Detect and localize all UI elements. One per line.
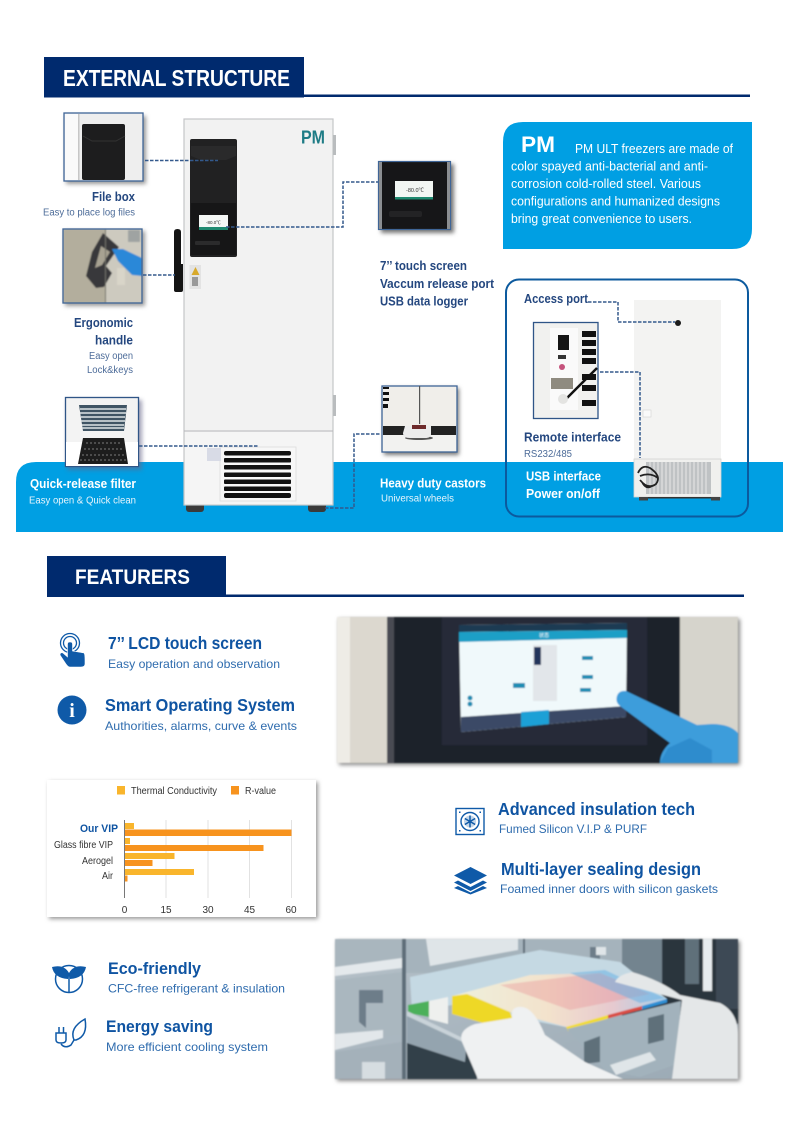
left drawers	[335, 939, 402, 972]
label: remote interface	[524, 430, 621, 460]
freezer front view	[174, 119, 336, 512]
label: ergonomic handle: handle	[95, 334, 133, 348]
chart bars	[124, 823, 292, 882]
white PM logo: PM	[521, 132, 555, 157]
section heading: featurers	[47, 556, 744, 597]
label: file box: Easy to place log files	[43, 208, 135, 218]
feature: smart operating system: Smart Operating System	[105, 695, 295, 715]
callout lines	[139, 160, 675, 508]
section heading: featurers: FEATURERS	[75, 566, 190, 589]
PM logo: PM	[301, 128, 325, 148]
feature: eco-friendly: Eco-friendly	[108, 959, 202, 978]
feature: LCD touch screen	[108, 633, 280, 671]
filter thumbnail	[66, 398, 142, 470]
chart legend	[117, 786, 276, 797]
chart axis labels: 60	[285, 905, 297, 916]
label: ergonomic handle	[74, 316, 133, 376]
label: file box: File box	[92, 190, 135, 204]
feature: multi-layer sealing design	[500, 859, 718, 896]
feature: multi-layer sealing design: Foamed inner doors with silicon gaskets	[500, 882, 718, 896]
icon: eco-friendly	[52, 966, 86, 992]
label: USB and power: USB interface	[526, 470, 601, 484]
label: ergonomic handle: Easy open	[89, 351, 133, 362]
top drawers	[406, 939, 622, 973]
touch screen thumbnail: -80.0℃	[406, 187, 425, 194]
file box thumbnail	[64, 113, 146, 184]
rating label	[207, 448, 221, 461]
chart axis labels: 15	[160, 905, 172, 916]
label: ergonomic handle: Ergonomic	[74, 316, 133, 330]
feature: eco-friendly: CFC-free refrigerant & insulation	[108, 982, 285, 996]
feature: advanced insulation tech	[498, 799, 695, 836]
callout: PM ULT freezers: bring great convenience to users.	[511, 212, 692, 226]
icon: insulation	[456, 808, 484, 834]
icon: info	[58, 696, 86, 724]
photo: sample rack in freezer	[335, 939, 740, 1081]
sample tray	[407, 950, 681, 1077]
label: touch screen features: 7’’ touch screen	[380, 259, 467, 273]
label: quick-release filter: Easy open & Quick clean	[29, 496, 136, 506]
label: heavy duty castors	[380, 476, 486, 504]
callout: PM ULT freezers: color spayed anti-bacterial and anti-	[511, 160, 708, 174]
label: quick-release filter: Quick-release filter	[30, 477, 136, 491]
label: heavy duty castors: Universal wheels	[381, 494, 454, 504]
label: touch screen features: Vaccum release port	[380, 277, 495, 291]
section heading: external structure: EXTERNAL STRUCTURE	[63, 65, 290, 91]
feature: eco-friendly	[108, 959, 285, 996]
callout: PM ULT freezers	[503, 122, 752, 249]
port thumbnail	[534, 322, 598, 418]
chart category labels	[54, 823, 118, 882]
label: heavy duty castors: Heavy duty castors	[380, 476, 486, 490]
icon: layers	[454, 867, 487, 894]
feature: LCD touch screen: Easy operation and observation	[108, 657, 280, 671]
section heading: external structure	[44, 57, 750, 98]
door handle	[174, 229, 183, 292]
touch screen display	[459, 623, 627, 732]
control and file box panel	[190, 139, 237, 257]
callout: PM ULT freezers: PM ULT freezers are made of	[575, 142, 733, 156]
bar chart: thermal conductivity vs R-value	[47, 780, 318, 919]
dark cabinet right	[622, 939, 738, 1024]
label: touch screen features	[380, 259, 495, 308]
gloved finger	[616, 691, 738, 763]
rear freezer	[634, 300, 721, 500]
label: remote interface: Remote interface	[524, 430, 621, 444]
feature: smart operating system	[105, 695, 297, 733]
callout: PM ULT freezers: configurations and humanized designs	[511, 194, 720, 208]
feature: LCD touch screen: 7’’ LCD touch screen	[108, 633, 262, 653]
chart category labels: Aerogel	[82, 856, 113, 867]
chart legend: R-value	[245, 786, 276, 797]
castor thumbnail	[382, 386, 459, 455]
feature: advanced insulation tech: Fumed Silicon V.I.P & PURF	[499, 822, 647, 836]
icon: energy saving	[56, 1019, 86, 1047]
chart axis labels	[122, 905, 297, 916]
photo: touch screen in use	[337, 617, 740, 765]
panel: rear view	[506, 280, 748, 516]
label: remote interface: RS232/485	[524, 449, 572, 460]
chart legend: Thermal Conductivity	[131, 786, 217, 797]
compressor vent	[220, 447, 296, 501]
feature: energy saving: Energy saving	[106, 1017, 213, 1036]
control and file box panel: -80.0℃	[206, 220, 221, 225]
label: quick-release filter	[29, 477, 136, 506]
rear panel outline	[506, 280, 748, 516]
chart axis labels: 0	[122, 905, 128, 916]
chart axis labels: 30	[202, 905, 214, 916]
feature: smart operating system: Authorities, alarms, curve & events	[105, 719, 297, 733]
handle thumbnail	[63, 229, 145, 306]
warning label	[190, 265, 201, 289]
label: access port: Access port	[524, 292, 589, 306]
chart category labels: Air	[102, 871, 114, 882]
chart category labels: Glass fibre VIP	[54, 840, 113, 851]
panel: external structure	[16, 57, 783, 532]
feature: multi-layer sealing design: Multi-layer sealing design	[501, 859, 701, 879]
touch screen thumbnail	[378, 162, 454, 233]
feature: advanced insulation tech: Advanced insulation tech	[498, 799, 695, 819]
label: file box	[43, 190, 135, 218]
chart category labels: Our VIP	[80, 823, 118, 835]
label: touch screen features: USB data logger	[380, 294, 468, 308]
feature: energy saving	[106, 1017, 268, 1054]
icon: info: i	[69, 700, 75, 722]
touch screen display: 状态	[539, 632, 549, 639]
label: USB and power	[526, 470, 601, 501]
label: USB and power: Power on/off	[526, 487, 601, 501]
label: ergonomic handle: Lock&keys	[87, 365, 133, 376]
feature: energy saving: More efficient cooling system	[106, 1040, 268, 1054]
panel: featurers	[47, 556, 744, 1081]
chart axis labels: 45	[244, 905, 255, 916]
callout: PM ULT freezers: corrosion cold-rolled steel. Various	[511, 177, 701, 191]
gloved hands	[461, 1007, 623, 1079]
blue background band	[16, 462, 783, 532]
icon: touch	[60, 634, 85, 667]
